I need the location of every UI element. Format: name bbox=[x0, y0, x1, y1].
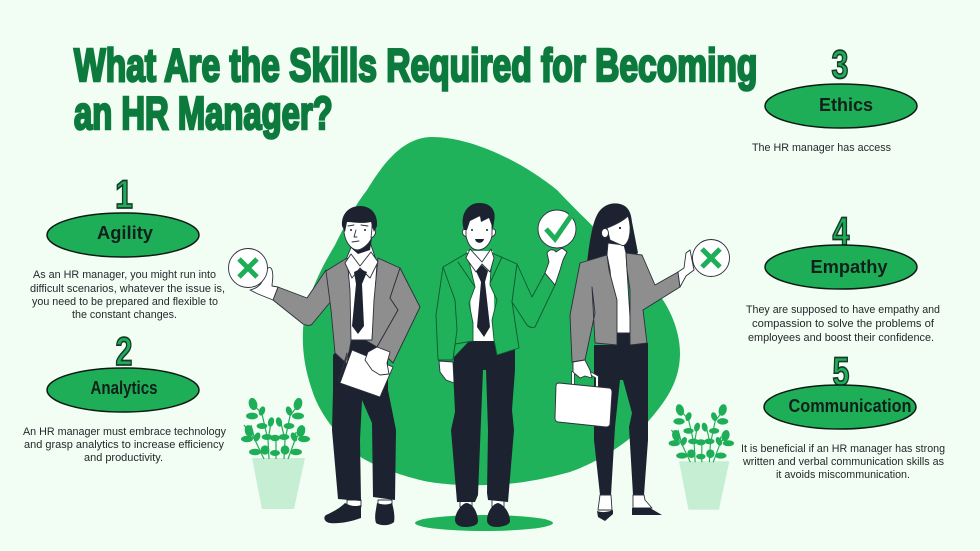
skill 1: agility: As an HR manager, you might run into bbox=[33, 269, 216, 281]
skill 5: communication: 5 bbox=[833, 349, 849, 394]
man 1 ear bbox=[371, 228, 376, 238]
cross sign circle right bbox=[692, 240, 730, 276]
man 1 shirt and neck bbox=[345, 242, 377, 340]
man 1 shoes bbox=[324, 503, 394, 525]
woman hair bbox=[587, 203, 638, 262]
man 2 jacket lines bbox=[443, 257, 502, 360]
man 2 tie bbox=[476, 265, 490, 337]
skill 5: communication: Communication bbox=[788, 396, 912, 416]
man 2 trousers bbox=[451, 338, 515, 502]
man 2 socks bbox=[460, 500, 504, 507]
woman left hand bbox=[573, 360, 592, 378]
woman jacket right panel and arm bbox=[626, 253, 680, 345]
man 2 right hand bbox=[545, 248, 567, 285]
green background blob bbox=[303, 137, 680, 485]
check sign circle bbox=[538, 210, 576, 248]
skill 4: empathy: compassion to solve the problems of bbox=[752, 318, 935, 330]
skill 2: analytics: An HR manager must embrace technology bbox=[23, 426, 226, 438]
title bbox=[74, 40, 757, 139]
man 1 beard shadow bbox=[350, 238, 372, 254]
ground shadow ellipse bbox=[415, 515, 553, 531]
right potted plant bbox=[669, 403, 734, 510]
skill 2: analytics: and productivity. bbox=[84, 452, 163, 464]
skill 1: agility: you need to be prepared and flexible to bbox=[32, 296, 218, 308]
woman jacket left panel and arm bbox=[570, 255, 617, 362]
woman shoes bbox=[597, 508, 662, 521]
cross sign circle left bbox=[228, 248, 268, 288]
skill 1: agility bbox=[30, 172, 225, 321]
woman trousers bbox=[594, 333, 648, 495]
man 2 mouth and eyes bbox=[475, 239, 484, 243]
man 1 face details bbox=[348, 225, 368, 242]
skill 2: analytics bbox=[23, 329, 226, 464]
skill 1: agility: the constant changes. bbox=[72, 309, 177, 321]
skill 4: empathy: 4 bbox=[833, 209, 850, 254]
skill 4: empathy: Empathy bbox=[810, 257, 888, 277]
man 2 ears bbox=[462, 229, 496, 237]
skill 5: communication: written and verbal communication skills as bbox=[742, 456, 944, 468]
skill 3: ethics: The HR manager has access bbox=[752, 142, 891, 154]
skill 2: analytics: and grasp analytics to increase efficiency bbox=[24, 439, 224, 451]
man 1 hair bbox=[342, 206, 377, 232]
woman cuff and hand bbox=[678, 250, 694, 287]
skill 5: communication bbox=[741, 349, 945, 481]
man 1 socks bbox=[347, 500, 392, 507]
skill 1: agility: difficult scenarios, whatever the issue is, bbox=[30, 283, 225, 295]
man 2 left jacket panel bbox=[436, 253, 475, 360]
man 1 head bbox=[344, 220, 372, 250]
skill 3: ethics: Ethics bbox=[819, 95, 873, 115]
man 1 left hand bbox=[250, 268, 278, 300]
man 1 trousers bbox=[332, 338, 396, 501]
skill 2: analytics: 2 bbox=[116, 329, 132, 374]
man 2 hair bbox=[463, 203, 495, 230]
man 2 left hand bbox=[439, 361, 454, 383]
skill 3: ethics: 3 bbox=[832, 42, 848, 87]
man 1 tie bbox=[352, 269, 367, 334]
skill 2: analytics: Analytics bbox=[90, 378, 158, 398]
man 1 right hand bbox=[365, 347, 390, 375]
skill 4: empathy: They are supposed to have empathy and bbox=[746, 304, 940, 316]
woman eye bbox=[619, 227, 621, 229]
man 2 collar bbox=[466, 249, 494, 272]
man 1 jacket right panel bbox=[365, 258, 400, 347]
man 2 shirt bbox=[467, 251, 495, 341]
title: an HR Manager? bbox=[74, 89, 333, 139]
man 2 right sleeve bbox=[512, 264, 555, 327]
figure: central man holding check sign bbox=[436, 203, 576, 527]
skill 4: empathy bbox=[746, 209, 940, 344]
man 1 collar bbox=[345, 252, 378, 278]
figure: woman holding cross sign and briefcase bbox=[555, 203, 730, 521]
man 1 jacket left panel bbox=[326, 258, 351, 364]
skill 4: empathy: employees and boost their confidence. bbox=[748, 332, 934, 344]
woman ear bbox=[602, 228, 608, 238]
left potted plant bbox=[241, 397, 310, 509]
skill 5: communication: It is beneficial if an HR manager has strong bbox=[741, 443, 945, 455]
skill 1: agility: 1 bbox=[115, 172, 133, 217]
figure: man holding cross sign and papers bbox=[228, 206, 420, 525]
man 2 right jacket panel bbox=[490, 253, 519, 355]
briefcase bbox=[555, 373, 612, 427]
title: What Are the Skills Required for Becoming bbox=[74, 40, 757, 91]
man 1 right arm bbox=[377, 268, 420, 363]
woman neck and shirt bbox=[607, 243, 631, 333]
skill 5: communication: it avoids miscommunication. bbox=[776, 469, 910, 481]
man 2 head bbox=[466, 216, 492, 250]
man 1 papers bbox=[340, 350, 393, 397]
skill 1: agility: Agility bbox=[97, 223, 153, 243]
skill 3: ethics bbox=[752, 42, 917, 154]
woman feet bbox=[598, 495, 652, 510]
man 2 shoes bbox=[455, 503, 510, 527]
man 1 left arm bbox=[273, 270, 332, 325]
woman face bbox=[607, 216, 630, 246]
